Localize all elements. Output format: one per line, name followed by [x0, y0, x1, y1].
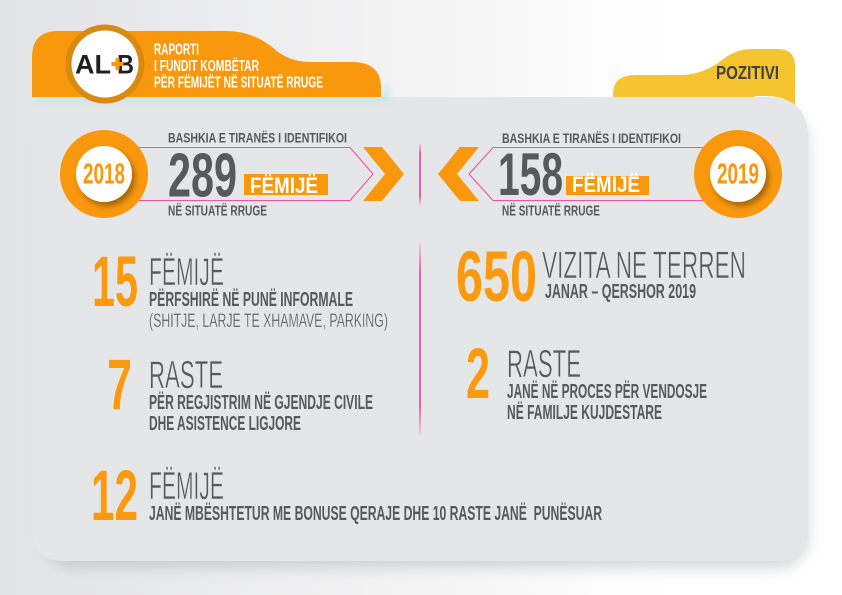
stat: 12 fëmijë: 12	[91, 457, 138, 536]
2018 stat: NË SITUATË RRUGE	[168, 203, 267, 220]
stat: 15 fëmijë: 15	[92, 243, 138, 322]
label bar fëmijë	[566, 176, 649, 195]
stat: 7 raste: 7	[107, 346, 132, 425]
label: pozitivi: POZITIVI	[716, 62, 779, 83]
stat: 2 raste: NË FAMILJE KUJDESTARE	[507, 401, 662, 424]
logo: AL	[75, 50, 111, 80]
stat: 15 fëmijë: PËRFSHIRË NË PUNË INFORMALE	[149, 288, 353, 311]
stat: 2 raste: 2	[466, 335, 490, 414]
chevron right	[363, 147, 404, 201]
header glow	[36, 84, 388, 101]
year badge 2019: 2019	[717, 158, 759, 190]
column divider bottom	[419, 243, 421, 435]
stat: 15 fëmijë	[92, 243, 388, 332]
main panel	[32, 97, 808, 561]
year badge 2018	[60, 130, 148, 218]
column divider top	[419, 144, 421, 205]
header text: RAPORTI	[154, 41, 199, 58]
stat: 650 vizita: 650	[456, 238, 537, 317]
stat: 2 raste: RASTE	[507, 343, 581, 386]
header text: PËR FËMIJËT NË SITUATË RRUGE	[154, 74, 323, 92]
pink arrow frame 2019	[469, 148, 710, 200]
stat: 7 raste: PËR REGJISTRIM NË GJENDJE CIVILE	[149, 391, 373, 414]
2019 stat: 158	[498, 140, 563, 208]
pink arrow frame 2018	[130, 148, 373, 200]
stat: 650 vizita: JANAR – QERSHOR 2019	[545, 281, 696, 303]
year badge 2019	[694, 130, 782, 218]
stat: 15 fëmijë: (SHITJE, LARJE TE XHAMAVE, PARKING)	[149, 311, 388, 332]
header banner	[32, 31, 381, 97]
year badge 2018: 2018	[83, 158, 125, 190]
stat: 2 raste: JANË NË PROCES PËR VENDOSJE	[507, 380, 707, 403]
panel shadow	[44, 112, 808, 568]
stat: 7 raste: DHE ASISTENCE LIGJORE	[149, 413, 301, 435]
2018 stat: BASHKIA E TIRANËS I IDENTIFIKOI	[168, 130, 347, 146]
header text	[154, 41, 323, 92]
chevron left	[438, 147, 479, 201]
logo: B	[117, 50, 134, 80]
header text: I FUNDIT KOMBËTAR	[154, 57, 259, 75]
label bar fëmijë	[244, 174, 328, 195]
2019 stat: BASHKIA E TIRANËS I IDENTIFIKOI	[502, 130, 681, 146]
stat: 15 fëmijë: FËMIJË	[149, 251, 224, 294]
stat: 7 raste: RASTE	[149, 354, 223, 397]
tab: pozitivi	[613, 49, 795, 108]
2019 stat: FËMIJË	[572, 172, 640, 197]
stat: 12 fëmijë: FËMIJË	[149, 465, 224, 508]
2018 stat	[60, 130, 404, 220]
panel highlight	[755, 96, 800, 110]
stat: 7 raste	[107, 346, 373, 435]
2019 stat: NË SITUATË RRUGE	[502, 203, 600, 220]
logo	[66, 24, 144, 104]
2018 stat: 289	[168, 142, 237, 210]
stat: 12 fëmijë	[91, 457, 602, 536]
2018 stat: FËMIJË	[250, 173, 318, 198]
stat: 650 vizita	[456, 238, 746, 317]
2019 stat	[438, 130, 782, 220]
stat: 2 raste	[466, 335, 707, 424]
